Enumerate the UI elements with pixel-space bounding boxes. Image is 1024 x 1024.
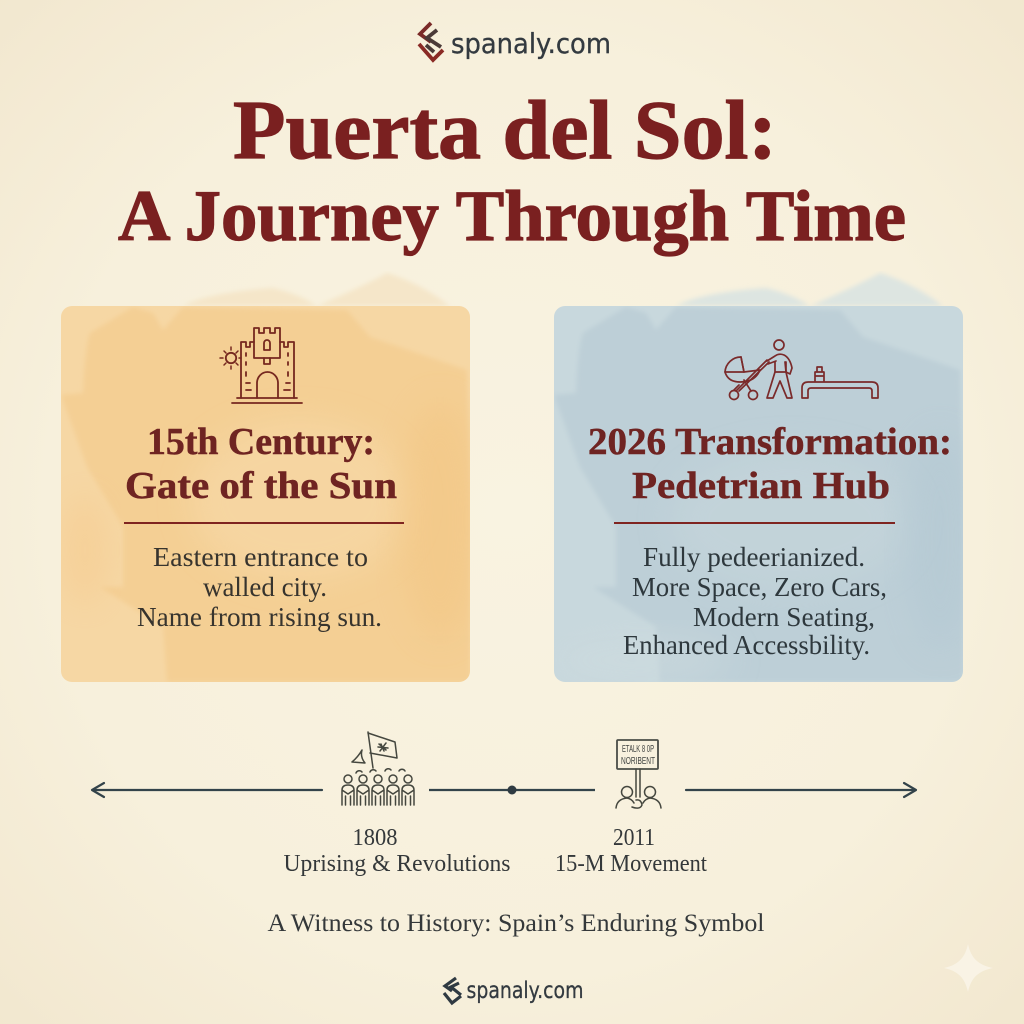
event label: 2011: 2011 — [613, 825, 655, 851]
icon: crowd with flags — [342, 732, 414, 805]
heading — [125, 421, 397, 507]
body text: More Space, Zero Cars, — [632, 572, 887, 602]
panel: 2026 transformation — [550, 273, 975, 685]
logo text: spanaly.com — [466, 978, 584, 1004]
body text: Enhanced Accessbility. — [623, 630, 870, 660]
event label: 1808: Uprising & Revolutions — [284, 851, 510, 877]
icon: protest sign with two people — [616, 740, 661, 808]
divider — [614, 522, 895, 524]
panel: 15th century — [61, 273, 480, 682]
watercolor wash — [61, 273, 480, 682]
body text — [623, 542, 887, 660]
timeline segment with dot — [429, 786, 595, 794]
divider — [124, 522, 404, 524]
logo mark — [444, 978, 461, 1003]
event label: 2011: 15-M Movement — [555, 851, 707, 877]
event label: 1808 — [284, 825, 510, 877]
icon: protest sign with two people: NORIBENT — [621, 756, 655, 767]
timeline — [92, 732, 916, 877]
body text: Eastern entrance to — [153, 542, 368, 572]
arrow: right — [686, 783, 916, 797]
logo text: spanaly.com — [451, 27, 611, 60]
heading: 2026 Transformation: — [588, 421, 952, 463]
body text: Modern Seating, — [693, 602, 875, 632]
icon: stroller, pedestrian and bench — [725, 340, 878, 400]
closing caption: A Witness to History: Spain’s Enduring Symbol — [268, 910, 765, 937]
body text: Name from rising sun. — [137, 602, 382, 632]
heading: Pedetrian Hub — [632, 465, 890, 507]
icon: protest sign with two people: ETALK 8 0P — [622, 744, 654, 755]
title — [118, 84, 906, 256]
event label: 1808: 1808 — [352, 825, 398, 851]
heading: Gate of the Sun — [125, 465, 397, 507]
icon: castle gate and sun — [220, 328, 302, 403]
title: A Journey Through Time — [118, 176, 906, 256]
event label: 2011 — [555, 825, 707, 877]
top logo — [419, 23, 611, 60]
bottom logo — [444, 978, 584, 1004]
body text: Fully pedeerianized. — [643, 542, 865, 572]
arrow: left — [92, 783, 322, 797]
heading — [588, 421, 952, 507]
watercolor wash — [550, 273, 975, 685]
body text: walled city. — [203, 572, 327, 602]
logo mark — [419, 23, 443, 60]
heading: 15th Century: — [147, 421, 375, 463]
title: Puerta del Sol: — [233, 84, 777, 177]
icon: sparkle — [944, 944, 993, 992]
body text — [137, 542, 382, 632]
